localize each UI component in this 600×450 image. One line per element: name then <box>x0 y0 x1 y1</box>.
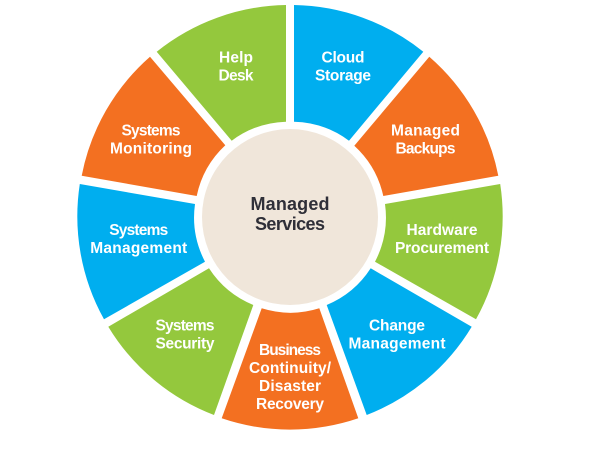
segment: Cloud Storage: Cloud <box>322 50 364 66</box>
segment: Systems Management: Systems <box>109 222 168 239</box>
segment: Hardware Procurement: Procurement <box>395 240 489 257</box>
segment: Business Continuity / Disaster Recovery: Recovery <box>256 396 324 413</box>
segment: Business Continuity / Disaster Recovery: Continuity/ <box>249 360 332 377</box>
segment: Cloud Storage <box>294 5 423 141</box>
segment: Help Desk: Desk <box>218 68 254 84</box>
segment: Hardware Procurement: Hardware <box>406 222 478 239</box>
segment: Change Management: Management <box>348 336 446 352</box>
segment: Business Continuity / Disaster Recovery: Business <box>259 342 321 359</box>
segment: Systems Monitoring <box>82 57 225 196</box>
segment: Cloud Storage: Storage <box>315 68 371 84</box>
center circle: Managed Services: Managed <box>250 194 330 214</box>
segment: Help Desk <box>157 5 286 141</box>
segment: Systems Management <box>77 184 205 319</box>
segment: Help Desk: Help <box>219 50 253 66</box>
segment: Hardware Procurement <box>375 184 503 319</box>
segment: Change Management: Change <box>369 318 425 334</box>
segment: Managed Backups: Managed <box>391 122 460 140</box>
segment: Systems Monitoring: Monitoring <box>110 140 192 158</box>
segment: Business Continuity / Disaster Recovery <box>222 308 358 430</box>
segment: Change Management <box>327 268 472 415</box>
segment: Systems Security: Systems <box>156 318 214 334</box>
segment: Systems Security <box>108 268 253 415</box>
segment: Managed Backups: Backups <box>396 140 456 158</box>
center circle: Managed Services: Services <box>255 214 325 234</box>
center circle: Managed Services <box>202 129 378 305</box>
segment: Systems Management: Management <box>90 240 187 257</box>
segment: Systems Monitoring: Systems <box>122 122 180 140</box>
segment: Managed Backups <box>354 57 498 196</box>
segment: Business Continuity / Disaster Recovery: Disaster <box>259 378 321 395</box>
segment: Systems Security: Security <box>156 336 215 352</box>
